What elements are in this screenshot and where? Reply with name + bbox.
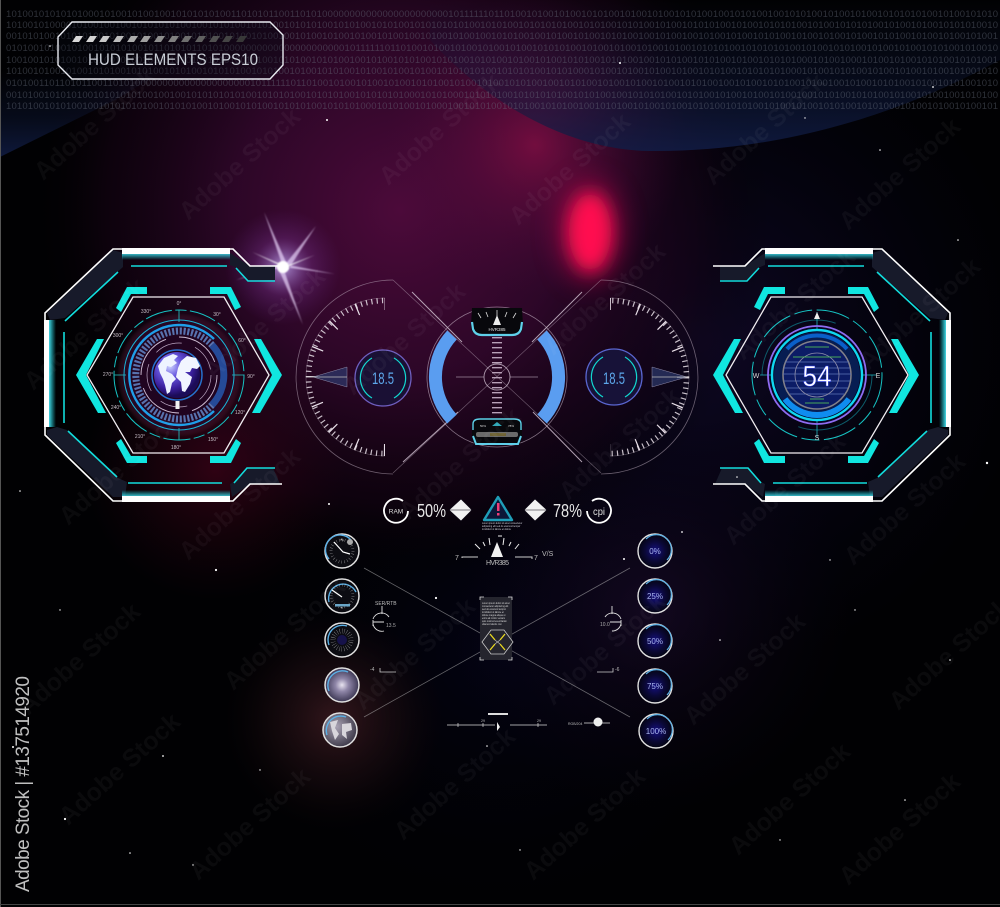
dial inner disc [783, 341, 851, 409]
binary code background: 01010010100101001010101001011010101101010000000000000000000000101111110110100101001010010100101001010101001010010100101001010010101010010101010100101001010100101001010010101001010010 [6, 43, 998, 54]
compass right: 10.0 [600, 622, 610, 628]
50 percent: 50% [417, 501, 446, 521]
degree labels: 60° [238, 338, 246, 344]
horizontal heading scale: 29 [481, 719, 485, 723]
Adobe Stock watermarks: Adobe Stock [724, 737, 856, 861]
bottom instrument box [472, 418, 522, 444]
degree labels: 330° [141, 309, 151, 315]
0 percent [638, 534, 672, 568]
connecting X lines [364, 568, 630, 717]
right column of percentage gauges [638, 534, 673, 748]
globe dial [103, 301, 255, 451]
Adobe Stock watermarks: Adobe Stock [719, 427, 851, 551]
digital readout 54: 54 [802, 361, 832, 393]
progress stripes [72, 36, 247, 42]
degree labels: 180° [171, 445, 181, 451]
RAM ring [384, 499, 408, 523]
warning caption [482, 522, 522, 531]
right readout: 18.5 [603, 369, 625, 388]
CPI ring [587, 499, 611, 523]
warning caption: adipiscing elit sed do eiusmod tempor [482, 525, 521, 528]
binary code background: 10100101001010010101001010100101010010101010010101001010010101001010010100101001010101010010101010010101000101001010010100101001010100101010101000101001010100101001010010100101001010 [6, 66, 998, 77]
Adobe Stock watermarks: Adobe Stock [184, 762, 316, 886]
top instrument box: HVR385 [488, 327, 506, 332]
Adobe Stock watermarks: Adobe Stock [854, 252, 986, 376]
0 percent: 0% [649, 547, 661, 556]
panel: central instrument cluster [296, 280, 698, 474]
75 percent [638, 669, 672, 703]
Adobe Stock watermarks: Adobe Stock [394, 402, 526, 526]
right gauge [585, 280, 698, 474]
right scale -6: -6 [615, 667, 620, 673]
compass letters [753, 312, 881, 442]
Adobe Stock watermarks: Adobe Stock [219, 572, 351, 696]
binary code background: 10100101000010100100100101010101001001010100101010010101010010101001010100101010101010010101001010101010010101001010100101001010101001010010101010010100101010100101001010010101010010 [6, 20, 998, 31]
left scale -4: -4 [370, 667, 375, 673]
compass letters: E [876, 373, 881, 380]
degree labels [103, 301, 255, 451]
card text [482, 602, 510, 626]
Adobe Stock watermarks: Adobe Stock [174, 102, 306, 226]
frame cyan lines [64, 266, 275, 483]
gauge 1 [325, 534, 359, 568]
card text: dolore magna aliqua ut [482, 614, 506, 617]
header title: HUD ELEMENTS EPS10 [88, 50, 258, 69]
frame white outline [45, 249, 282, 501]
compass dial [752, 310, 882, 442]
HVR385 gauge: HVR385 [486, 560, 509, 567]
left scale -4 [370, 667, 396, 673]
Adobe Stock watermarks: Adobe Stock [729, 242, 861, 366]
horizontal heading scale: 29 [537, 719, 541, 723]
blue arcs [435, 335, 559, 419]
left gauge [296, 280, 412, 474]
25 percent [638, 579, 672, 613]
Adobe Stock watermarks: Adobe Stock [834, 112, 966, 236]
binary code background: 10101001010100100101010101001010101001010010101001010101001010101000101010010100010010101001010100101010010010101001010010100101010010101001010010100101010010101000101001010010100101 [6, 101, 998, 112]
100 percent: 100% [646, 727, 666, 736]
top instrument box [471, 308, 523, 335]
Adobe Stock watermarks: Adobe Stock [174, 442, 306, 566]
Adobe Stock watermarks: Adobe Stock [679, 607, 811, 731]
panel: left HUD frame with globe dial [44, 248, 282, 502]
binary code background: 10100101010101000101001010010010101010100110101011001101010000000000000000000000010111111011010010100101001010100101001010010101001001010100100101010010100101001010101010010100101010 [6, 9, 998, 20]
gauge 5 globe [323, 713, 357, 747]
header panel: HUD Elements EPS10 [58, 22, 283, 79]
Adobe Stock watermarks: Adobe Stock [699, 67, 831, 191]
degree labels: 300° [113, 333, 123, 339]
Adobe Stock watermarks: Adobe Stock [539, 237, 671, 361]
degree labels: 150° [208, 437, 218, 443]
Adobe Stock watermarks: Adobe Stock [554, 382, 686, 506]
degree labels: 120° [235, 410, 245, 416]
compass letters: W [753, 373, 760, 380]
status row: RAM, warning, CPI [384, 497, 611, 531]
card text: quis nostrud exercitation [482, 620, 508, 623]
Adobe Stock watermarks: Adobe Stock [14, 597, 146, 721]
binary code background: 10010010101001010100101001010010101001010100101001010100101010010010100101010010101001010100101001010010101001010100100101010010101001010010101010001010010001010010100101010010101001 [6, 55, 998, 66]
warning caption: incididunt ut labore et dolore [482, 528, 512, 531]
warning caption: Lorem ipsum dolor sit amet consectetur [482, 522, 522, 525]
degree labels: 240° [111, 405, 121, 411]
SER/RTB compass left: 13.5 [386, 623, 396, 629]
CPI ring: cpi [593, 507, 605, 518]
binary code background [6, 9, 998, 112]
globe [154, 352, 200, 409]
bottom instrument box: 78% [508, 424, 514, 428]
75 percent: 75% [647, 682, 663, 691]
compass right [600, 606, 621, 631]
Adobe Stock watermarks: Adobe Stock [19, 272, 151, 396]
Adobe Stock watermarks: Adobe Stock [389, 722, 521, 846]
HVR385 gauge: 7 [534, 555, 538, 562]
gauge 4 [325, 668, 359, 702]
frame glow bars [44, 248, 230, 502]
50 percent: 50% [647, 637, 663, 646]
compass letters: S [815, 435, 820, 442]
binary code background: 00101001010101001010101010010010010101010101001010101001010101001010101010001010100010101010010101010100101010010010101010010101001010010100101001001010100101010010100101001001010100 [6, 90, 998, 101]
Adobe Stock watermarks: Adobe Stock [199, 262, 331, 386]
card text: consectetur adipiscing elit [482, 605, 509, 608]
mirrored frame [713, 248, 951, 502]
HVR385 gauge: V/S [542, 551, 554, 558]
altitude ladder [492, 337, 502, 417]
binary code background: 00101010010101010010100101001010010101001010010100100101001010010100101001001010010100100101010010010100101001010100100101001001010010100101010010100101001010010101001010010100101001 [6, 31, 998, 42]
Adobe Stock watermarks: Adobe Stock [374, 67, 506, 191]
white hexagon [87, 297, 269, 453]
left readout: 18.5 [372, 369, 394, 388]
50 percent [638, 624, 672, 658]
Adobe Stock watermarks: Adobe Stock [339, 277, 471, 401]
right scale -6 [597, 667, 620, 673]
Adobe Stock watermarks: Adobe Stock [519, 762, 651, 886]
HVR385 gauge: 7 [455, 555, 459, 562]
degree labels: 210° [135, 434, 145, 440]
SER/RTB compass left: SER/RTB [375, 601, 397, 607]
bottom instrument box: 50% [480, 424, 486, 428]
left column of small gauges [323, 534, 359, 747]
card text: incididunt ut labore et [482, 611, 504, 614]
Adobe Stock watermarks: Adobe Stock [504, 107, 636, 231]
left diamond [449, 499, 472, 521]
lens flare [225, 209, 341, 325]
warning triangle [484, 497, 512, 520]
Adobe Stock watermarks: Adobe Stock [349, 592, 481, 716]
degree labels: 90° [247, 374, 255, 380]
HVR385 gauge [455, 536, 554, 567]
binary code background: 01010011011010110011010100000000000000000000010111111011010010100101001010010101001010010100101010010010101001010010100101001010100100101001010100101001001010010101001010010101001010 [6, 78, 998, 89]
card text: enim ad minim veniam [482, 618, 505, 620]
red glow blob [560, 182, 620, 282]
cyan chevrons and corner brackets [76, 287, 282, 463]
card text: Lorem ipsum dolor sit amet [482, 602, 510, 605]
card text: sed do eiusmod tempor [482, 608, 506, 611]
card text: ullamco laboris nisi [482, 623, 502, 626]
horizontal heading scale [447, 713, 547, 731]
78 percent: 78% [553, 501, 582, 521]
gauge 3 [325, 623, 359, 657]
panel: right HUD frame with speed dial [713, 248, 951, 502]
degree labels: 0° [177, 301, 181, 307]
Adobe Stock watermarks: Adobe Stock [834, 767, 966, 891]
gauge 2 [325, 579, 359, 613]
RAM ring: RAM [389, 508, 403, 516]
Adobe Stock watermarks: Adobe Stock [839, 447, 971, 571]
degree labels: 30° [213, 312, 221, 318]
100 percent [639, 714, 673, 748]
central info card [480, 597, 513, 660]
Adobe Stock watermarks: Adobe Stock [54, 707, 186, 831]
degree labels: 270° [103, 372, 113, 378]
roll indicator: RGB/204 [568, 722, 582, 726]
Adobe Stock watermarks: Adobe Stock [29, 62, 161, 186]
card hexagon target [482, 630, 513, 654]
crossing lines [393, 280, 601, 473]
25 percent: 25% [647, 592, 663, 601]
roll indicator [568, 718, 610, 726]
Adobe Stock watermarks: Adobe Stock [54, 407, 186, 531]
vertical stock credit: Adobe Stock | #137514920 [13, 676, 34, 892]
SER/RTB compass left [373, 601, 397, 631]
frame dark corner bands [47, 250, 280, 497]
Adobe Stock watermarks: Adobe Stock [539, 587, 671, 711]
right diamond [524, 499, 547, 521]
